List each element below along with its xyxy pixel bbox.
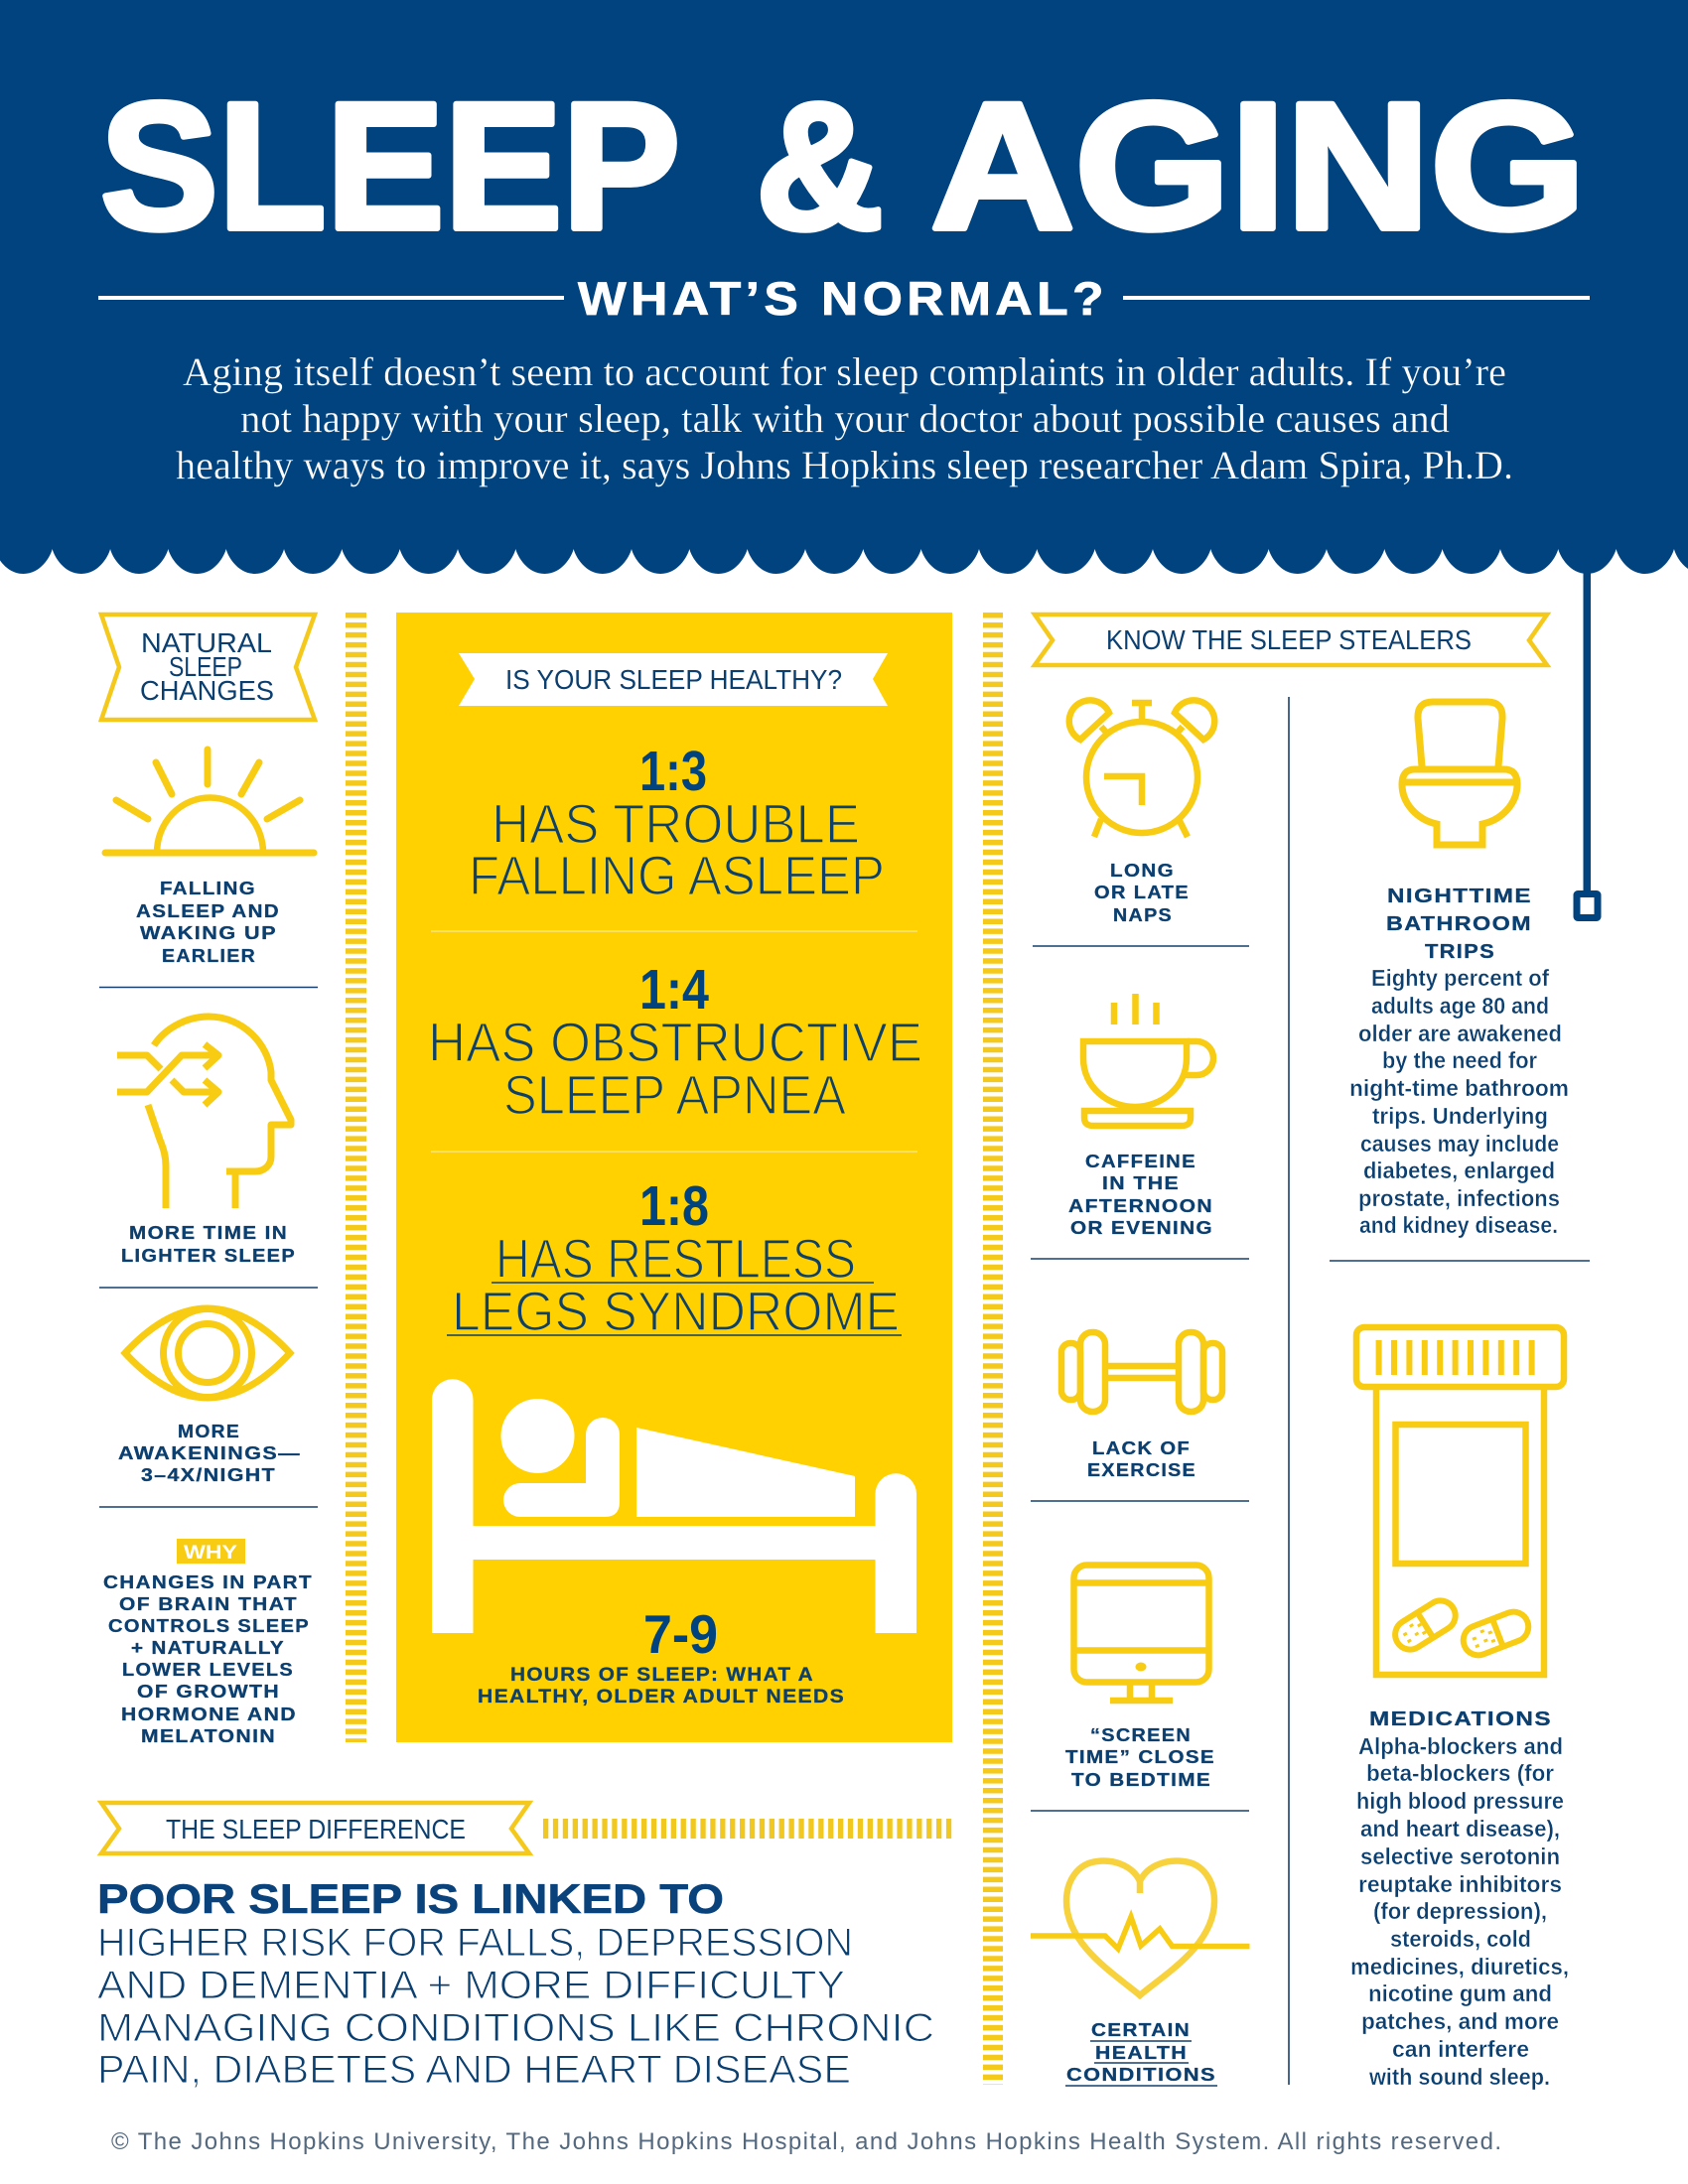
text: medications: beta-blockers (for — [1366, 1760, 1554, 1786]
stat: 1 in 3: HAS TROUBLE — [492, 792, 860, 855]
label: lighter sleep: MORE TIME IN — [129, 1223, 288, 1243]
text: medications: MEDICATIONS — [1369, 1708, 1552, 1730]
text: why explanation: HORMONE AND — [121, 1705, 297, 1724]
ribbon: natural sleep changes: NATURAL — [141, 627, 272, 658]
label: naps — [1094, 861, 1190, 925]
title: AGING — [930, 65, 1586, 267]
icon: person in bed — [432, 1379, 916, 1633]
icon: eye — [125, 1308, 290, 1398]
stat: 1 in 8 — [447, 1174, 902, 1342]
label: naps: OR LATE — [1094, 883, 1190, 902]
title: SLEEP — [100, 65, 680, 267]
label: exercise: LACK OF — [1092, 1438, 1191, 1458]
footer copyright: © The Johns Hopkins University, The Johns Hopkins Hospital, and Johns Hopkins Health System. All rights reserved. — [111, 2128, 1501, 2155]
label: screen time — [1065, 1725, 1215, 1790]
intro paragraph — [176, 349, 1513, 487]
label: caffeine: IN THE — [1102, 1173, 1180, 1193]
subtitle with rules: WHAT’S NORMAL? — [578, 272, 1108, 325]
text: bathroom trips — [1349, 886, 1569, 1238]
icon: alarm clock — [1069, 700, 1214, 837]
label: falling asleep: FALLING — [160, 879, 256, 898]
text: bathroom trips: and kidney disease. — [1359, 1212, 1558, 1238]
label: falling asleep: EARLIER — [162, 946, 256, 966]
label: screen time: TO BEDTIME — [1071, 1770, 1211, 1790]
label: lighter sleep — [121, 1223, 296, 1266]
label: exercise: EXERCISE — [1087, 1460, 1196, 1480]
text: medications: and heart disease), — [1360, 1816, 1560, 1842]
ribbon: is your sleep healthy — [459, 653, 888, 706]
ribbon: natural sleep changes: CHANGES — [140, 675, 274, 706]
text: why explanation: LOWER LEVELS — [122, 1660, 294, 1680]
icon: heart with pulse — [1031, 1861, 1249, 1995]
label: falling asleep: WAKING UP — [140, 923, 277, 943]
label: naps: LONG — [1110, 861, 1175, 881]
label: health conditions: CONDITIONS — [1066, 2065, 1216, 2085]
panel: know the sleep stealers — [1031, 614, 1590, 2090]
stat: 7-9 hours: HOURS OF SLEEP: WHAT A — [510, 1665, 814, 1686]
text: medications: reuptake inhibitors — [1358, 1871, 1562, 1897]
text: medications: can interfere — [1392, 2036, 1529, 2062]
ribbon: natural sleep changes: SLEEP — [169, 651, 242, 682]
label: falling asleep — [136, 879, 280, 966]
ribbon: natural sleep changes — [101, 614, 315, 720]
label: exercise — [1087, 1438, 1196, 1480]
text: why explanation: CHANGES IN PART — [103, 1572, 313, 1592]
text: medications: nicotine gum and — [1368, 1980, 1552, 2006]
text: bathroom trips: NIGHTTIME — [1387, 886, 1532, 907]
text: medications: medicines, diuretics, — [1350, 1954, 1569, 1979]
label: screen time: TIME” CLOSE — [1065, 1747, 1215, 1767]
ribbon: the sleep difference: THE SLEEP DIFFERENCE — [166, 1814, 466, 1844]
panel: is your sleep healthy — [396, 613, 952, 1742]
text: bathroom trips: by the need for — [1382, 1047, 1537, 1073]
text: bathroom trips: trips. Underlying — [1372, 1103, 1548, 1129]
panel: the sleep difference — [97, 1803, 953, 2092]
text: why explanation: CONTROLS SLEEP — [108, 1616, 310, 1636]
header banner with scalloped edge — [0, 0, 1688, 574]
text: bathroom trips: prostate, infections — [1358, 1185, 1560, 1211]
stat: 7-9 hours: HEALTHY, OLDER ADULT NEEDS — [478, 1687, 845, 1707]
text: medications — [1350, 1708, 1569, 2090]
intro paragraph: Aging itself doesn’t seem to account for sleep complaints in older adults. If you’re — [183, 349, 1506, 394]
text: why explanation — [103, 1572, 313, 1746]
stat: 1 in 3: FALLING ASLEEP — [469, 844, 885, 906]
subtitle with rules — [98, 272, 1590, 325]
label: health conditions: HEALTH — [1095, 2043, 1188, 2063]
text: medications: (for depression), — [1373, 1898, 1547, 1924]
text: medications: steroids, cold — [1390, 1926, 1531, 1952]
text: bathroom trips: older are awakened — [1358, 1021, 1562, 1046]
text: bathroom trips: TRIPS — [1425, 941, 1495, 963]
icon: capsule — [1459, 1607, 1533, 1660]
text: medications: patches, and more — [1361, 2008, 1559, 2034]
panel: natural sleep changes — [99, 614, 318, 1746]
text: medications: with sound sleep. — [1368, 2064, 1550, 2090]
label: more awakenings: MORE — [178, 1422, 240, 1441]
text: why explanation: OF BRAIN THAT — [119, 1594, 298, 1614]
ribbon: sleep stealers: KNOW THE SLEEP STEALERS — [1106, 624, 1472, 655]
label: caffeine: AFTERNOON — [1068, 1196, 1213, 1216]
label: caffeine: OR EVENING — [1070, 1218, 1213, 1238]
text: bathroom trips: Eighty percent of — [1371, 965, 1549, 991]
stat: 1 in 8: LEGS SYNDROME — [452, 1280, 900, 1342]
text: medications: high blood pressure — [1356, 1788, 1564, 1814]
icon: desktop monitor — [1074, 1565, 1209, 1701]
stat: 1 in 8: 1:8 — [639, 1174, 709, 1238]
text: poor sleep consequences — [97, 1875, 934, 2092]
text: poor sleep consequences: POOR SLEEP IS LINKED TO — [97, 1875, 724, 1922]
text: bathroom trips: adults age 80 and — [1371, 993, 1549, 1019]
label: why tag: WHY — [184, 1543, 237, 1564]
label: screen time: “SCREEN — [1090, 1725, 1192, 1745]
icon: rising sun — [105, 750, 314, 853]
title — [100, 65, 1586, 267]
text: bathroom trips: diabetes, enlarged — [1363, 1158, 1555, 1183]
text: poor sleep consequences: PAIN, DIABETES AND HEART DISEASE — [97, 2048, 851, 2092]
text: why explanation: + NATURALLY — [131, 1638, 285, 1658]
label: naps: NAPS — [1113, 905, 1173, 925]
label: health conditions — [1065, 2020, 1217, 2086]
stat: 7-9 hours — [478, 1603, 845, 1707]
label: why tag — [177, 1539, 245, 1564]
text: medications: selective serotonin — [1360, 1843, 1560, 1869]
text: poor sleep consequences: HIGHER RISK FOR FALLS, DEPRESSION — [97, 1921, 853, 1965]
stat: 1 in 4: HAS OBSTRUCTIVE — [428, 1011, 922, 1073]
ribbon: sleep stealers — [1035, 614, 1547, 665]
stat: 1 in 4: SLEEP APNEA — [503, 1063, 847, 1126]
icon: capsule — [1389, 1595, 1461, 1655]
label: more awakenings — [118, 1422, 301, 1485]
ribbon: the sleep difference — [101, 1803, 529, 1853]
text: poor sleep consequences: MANAGING CONDITIONS LIKE CHRONIC — [97, 2006, 934, 2050]
intro paragraph: healthy ways to improve it, says Johns Hopkins sleep researcher Adam Spira, Ph.D. — [176, 443, 1513, 487]
text: medications: Alpha-blockers and — [1358, 1733, 1563, 1759]
icon: coffee cup — [1083, 994, 1213, 1126]
icon: pill bottle — [1356, 1327, 1564, 1675]
label: more awakenings: AWAKENINGS— — [118, 1443, 301, 1463]
stat: 1 in 3: 1:3 — [639, 740, 707, 803]
text: bathroom trips: night-time bathroom — [1349, 1075, 1569, 1101]
label: caffeine: CAFFEINE — [1085, 1152, 1196, 1171]
label: lighter sleep: LIGHTER SLEEP — [121, 1246, 296, 1266]
intro paragraph: not happy with your sleep, talk with your doctor about possible causes and — [240, 396, 1450, 441]
ribbon: is your sleep healthy: IS YOUR SLEEP HEALTHY? — [505, 664, 842, 695]
icon: head with crossing arrows — [117, 1017, 291, 1208]
stat: 1 in 4: 1:4 — [639, 958, 709, 1022]
text: why explanation: OF GROWTH — [137, 1682, 280, 1702]
stat: 1 in 8: HAS RESTLESS — [495, 1227, 856, 1290]
icon: toilet — [1402, 702, 1517, 845]
label: caffeine — [1068, 1152, 1213, 1238]
icon: dumbbell — [1061, 1332, 1222, 1412]
label: more awakenings: 3–4X/NIGHT — [141, 1465, 276, 1485]
label: falling asleep: ASLEEP AND — [136, 901, 280, 921]
text: bathroom trips: causes may include — [1360, 1131, 1559, 1157]
stat: 1 in 4 — [428, 958, 922, 1126]
label: health conditions: CERTAIN — [1091, 2020, 1191, 2040]
hanging tag line — [1577, 566, 1598, 917]
stat: 7-9 hours: 7-9 — [643, 1603, 718, 1665]
title: & — [756, 65, 884, 267]
text: bathroom trips: BATHROOM — [1386, 913, 1532, 935]
stat: 1 in 3 — [469, 740, 885, 906]
text: poor sleep consequences: AND DEMENTIA + MORE DIFFICULTY — [97, 1964, 845, 2007]
text: why explanation: MELATONIN — [141, 1726, 276, 1746]
